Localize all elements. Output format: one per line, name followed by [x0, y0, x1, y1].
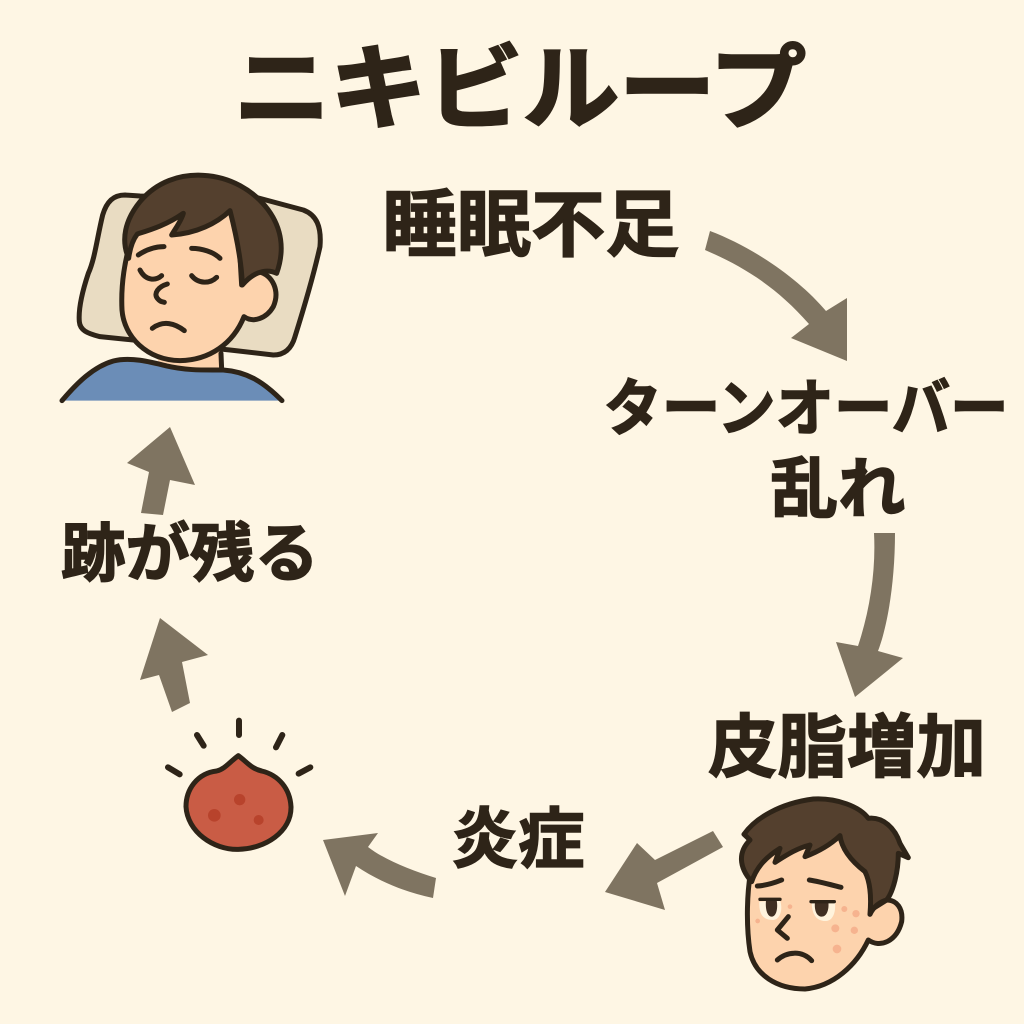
icon: acne-prone face	[741, 799, 908, 989]
label: sebum increase: 皮脂増加	[708, 709, 986, 786]
arrow: turnover to sebum	[836, 533, 903, 697]
arrow: scar to sleep	[127, 427, 195, 515]
icon: inflamed pimple	[168, 721, 310, 849]
title: ニキビループ	[234, 39, 806, 141]
arrow: pimple to scar	[140, 618, 208, 712]
label: scars remain: 跡が残る	[61, 518, 319, 590]
arrow: sleep to turnover	[705, 231, 847, 361]
arrow: sebum to inflammation	[605, 831, 723, 910]
label: inflammation: 炎症	[452, 802, 584, 876]
label: sleep deprivation: 睡眠不足	[382, 185, 680, 266]
label: turnover disorder: ターンオーバー	[604, 375, 1008, 444]
icon: sleeping person	[62, 175, 320, 401]
label: turnover disorder	[604, 375, 1008, 526]
label: turnover disorder: 乱れ	[770, 452, 906, 526]
arrow: inflammation to pimple	[323, 833, 436, 898]
